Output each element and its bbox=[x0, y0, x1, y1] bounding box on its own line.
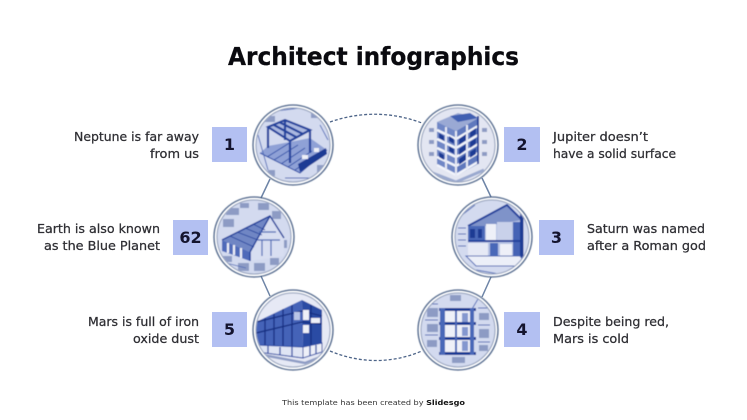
connector: right lower line bbox=[482, 277, 491, 297]
icon: glass facade building bbox=[253, 290, 333, 370]
text: step 5: Mars is full of iron bbox=[88, 315, 199, 329]
step 2 bbox=[418, 105, 676, 185]
number box 4 bbox=[504, 312, 540, 347]
text: step 4 bbox=[553, 315, 669, 346]
text: step 2: Jupiter doesn’t bbox=[552, 130, 648, 144]
icon: house cutaway bbox=[452, 197, 532, 277]
icon: concrete tower frame bbox=[418, 105, 498, 185]
text: step 6: as the Blue Planet bbox=[44, 239, 160, 253]
step 1 bbox=[74, 105, 333, 185]
icon: timber frame structure bbox=[253, 105, 333, 185]
step 5 bbox=[88, 290, 333, 370]
text: step 4: Mars is cold bbox=[553, 332, 629, 346]
text: step 3 bbox=[587, 222, 706, 253]
connector: left lower line bbox=[261, 276, 270, 296]
text: step 5: oxide dust bbox=[133, 332, 199, 346]
icon: building section drawing bbox=[418, 290, 498, 370]
footer credit: This template has been created by Slidesgo bbox=[281, 399, 465, 407]
text: step 2 bbox=[552, 130, 676, 161]
number box 2: 2 bbox=[516, 135, 528, 154]
text: step 6 bbox=[37, 222, 160, 253]
number box 1 bbox=[212, 127, 247, 162]
number box 3: 3 bbox=[551, 228, 562, 247]
text: step 5 bbox=[88, 315, 199, 346]
step 4 bbox=[418, 290, 669, 370]
icon: gabled house bbox=[214, 197, 294, 277]
number box 62: 62 bbox=[179, 228, 202, 247]
step 3 bbox=[452, 197, 706, 277]
text: step 2: have a solid surface bbox=[553, 147, 676, 161]
number box 3 bbox=[539, 220, 574, 255]
number box 1: 1 bbox=[224, 135, 235, 154]
text: step 3: after a Roman god bbox=[587, 239, 706, 253]
number box 4: 4 bbox=[516, 320, 528, 339]
text: step 3: Saturn was named bbox=[587, 222, 705, 236]
title: Architect infographics bbox=[228, 42, 519, 71]
connector: top dashed arc bbox=[330, 114, 422, 123]
number box 62 bbox=[173, 220, 208, 255]
text: step 6: Earth is also known bbox=[37, 222, 160, 236]
text: step 1 bbox=[74, 130, 199, 161]
text: step 4: Despite being red, bbox=[553, 315, 669, 329]
number box 5: 5 bbox=[224, 320, 235, 339]
number box 5 bbox=[212, 312, 247, 347]
number box 2 bbox=[504, 127, 540, 162]
step 6 bbox=[37, 197, 294, 277]
connector: left upper line bbox=[261, 179, 270, 198]
text: step 1: Neptune is far away bbox=[74, 130, 199, 144]
connector: bottom dashed arc bbox=[330, 351, 422, 360]
connector: right upper line bbox=[482, 178, 491, 197]
text: step 1: from us bbox=[150, 147, 199, 161]
